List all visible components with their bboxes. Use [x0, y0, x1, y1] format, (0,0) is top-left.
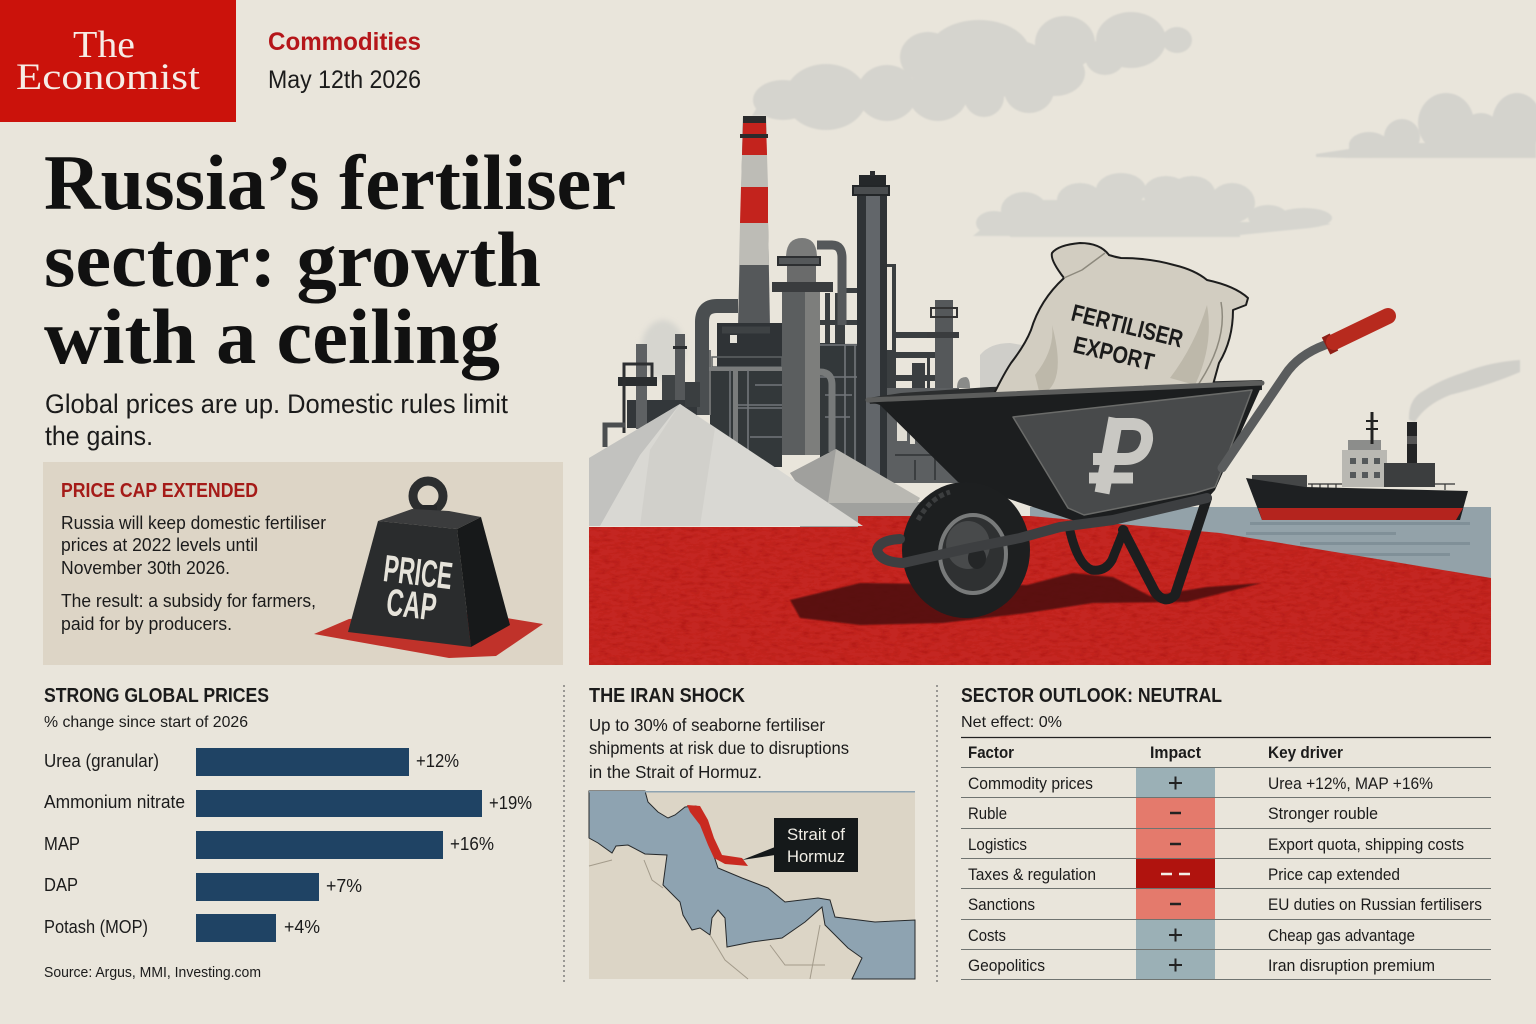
title: with a ceiling: [44, 293, 500, 380]
table header: Impact: [1150, 743, 1201, 762]
arm with red grip: [1222, 316, 1388, 468]
smoke cloud from chimney: [752, 12, 1192, 130]
panel: price cap extended: [43, 462, 563, 665]
tray: [868, 383, 1262, 527]
title: [44, 139, 626, 380]
bar: ammonium nitrate: [44, 790, 532, 817]
tall column: [853, 171, 889, 480]
row: ruble: [968, 804, 1378, 823]
row: costs: Costs: [968, 926, 1006, 945]
chart heading: STRONG GLOBAL PRICES: [44, 685, 269, 707]
row: taxes and regulation: Taxes & regulation: [968, 865, 1096, 884]
section and date: May 12th 2026: [268, 66, 421, 94]
masthead logo: The: [73, 24, 135, 66]
wheelbarrow: [868, 243, 1388, 618]
subtitle: the gains.: [45, 421, 153, 451]
fertiliser pile: [589, 404, 863, 526]
chimney: [738, 116, 770, 327]
ruble sign: [1089, 418, 1147, 493]
ground shadow: [790, 573, 1262, 625]
left towers: [605, 334, 700, 447]
outlook heading: SECTOR OUTLOOK: NEUTRAL: [961, 685, 1222, 707]
bar: DAP: [44, 873, 362, 901]
row: ruble: Stronger rouble: [1268, 804, 1378, 823]
row: ruble: Ruble: [968, 804, 1007, 823]
bar: ammonium nitrate: +19%: [489, 793, 532, 813]
callout: Strait of Hormuz: Hormuz: [787, 847, 845, 866]
back rim: [868, 380, 1262, 404]
price cap body text: November 30th 2026.: [61, 558, 230, 578]
process block: [703, 323, 857, 470]
bar: DAP: +7%: [326, 876, 362, 896]
bar: urea: [44, 748, 459, 776]
Iran heading: THE IRAN SHOCK: [589, 685, 745, 707]
ship smoke: [1409, 360, 1520, 422]
Iran body text: in the Strait of Hormuz.: [589, 762, 762, 782]
table header: Factor: [968, 743, 1014, 762]
row: logistics: [968, 835, 1464, 854]
cloud centre: [973, 173, 1332, 237]
outlook table: [961, 738, 1491, 980]
chart subheading: % change since start of 2026: [44, 714, 248, 731]
bar: urea: Urea (granular): [44, 751, 159, 771]
pipes: [702, 245, 842, 452]
price cap body text: The result: a subsidy for farmers,: [61, 591, 316, 611]
row: logistics: Logistics: [968, 835, 1027, 854]
bar: potash: Potash (MOP): [44, 917, 148, 937]
icon: price cap weight: [314, 481, 543, 658]
back frame: [820, 264, 937, 480]
masthead logo: [0, 0, 236, 122]
bar: potash: +4%: [284, 917, 320, 937]
cloud right: [1316, 93, 1536, 158]
row: commodity prices: Urea +12%, MAP +16%: [1268, 774, 1433, 793]
bar: urea: +12%: [416, 751, 459, 771]
Iran body text: [589, 715, 849, 782]
icon: price cap weight: CAP: [384, 582, 439, 629]
price cap body text: Russia will keep domestic fertiliser: [61, 513, 326, 533]
row: sanctions: Sanctions: [968, 895, 1035, 914]
map water: [589, 791, 915, 979]
row: costs: [968, 926, 1415, 945]
callout: Strait of Hormuz: Strait of: [787, 825, 845, 844]
row: geopolitics: [968, 956, 1435, 975]
frame tube: [877, 498, 1207, 563]
net effect: Net effect: 0%: [961, 714, 1062, 731]
row: geopolitics: Geopolitics: [968, 956, 1045, 975]
fertiliser bag: EXPORT: [1071, 332, 1157, 376]
right tower: [887, 300, 970, 483]
row: commodity prices: Commodity prices: [968, 774, 1093, 793]
chart: strong global prices: [44, 685, 532, 981]
panel: sector outlook: [961, 685, 1491, 980]
main column: [772, 238, 833, 455]
price cap heading: PRICE CAP EXTENDED: [61, 480, 258, 502]
subtitle: [45, 389, 508, 451]
fertiliser bag: [990, 243, 1248, 402]
bar: potash: [44, 914, 320, 942]
map: Strait of Hormuz: [589, 791, 915, 979]
bar: MAP: [44, 831, 494, 859]
price cap body text: prices at 2022 levels until: [61, 535, 258, 555]
row: geopolitics: Iran disruption premium: [1268, 956, 1435, 975]
table header: Key driver: [1268, 743, 1343, 762]
impact cells: [1136, 768, 1215, 979]
Iran body text: Up to 30% of seaborne fertiliser: [589, 715, 825, 735]
row: sanctions: [968, 895, 1482, 914]
refinery: [605, 116, 970, 483]
row: taxes and regulation: [968, 865, 1400, 884]
illustration: refinery, wheelbarrow and ship: [589, 12, 1536, 665]
Iran body text: shipments at risk due to disruptions: [589, 738, 849, 758]
highlighted shipping route: [687, 805, 748, 866]
title: sector: growth: [44, 216, 541, 303]
table header: [968, 743, 1343, 762]
section and date: [268, 28, 421, 94]
legs: [1070, 498, 1207, 599]
front rim: [868, 383, 1262, 400]
price cap body text: paid for by producers.: [61, 614, 232, 634]
callout: Strait of Hormuz: [742, 818, 858, 872]
subtitle: Global prices are up. Domestic rules limit: [45, 389, 508, 419]
ground: red fertiliser field: [589, 516, 1491, 665]
row: taxes and regulation: Price cap extended: [1268, 865, 1400, 884]
grey pad: [800, 502, 940, 528]
icon: price cap weight: PRICE: [381, 548, 455, 598]
bar: DAP: DAP: [44, 875, 78, 895]
source: Source: Argus, MMI, Investing.com: [44, 964, 261, 981]
title: Russia’s fertiliser: [44, 139, 626, 226]
section and date: Commodities: [268, 28, 421, 56]
row: commodity prices: [968, 774, 1433, 793]
bar: MAP: +16%: [450, 834, 494, 854]
wheel: [902, 482, 1030, 618]
water: [1030, 507, 1491, 592]
ship: [1246, 412, 1468, 520]
bar: MAP: MAP: [44, 834, 80, 854]
bar: ammonium nitrate: Ammonium nitrate: [44, 792, 185, 812]
row: costs: Cheap gas advantage: [1268, 926, 1415, 945]
second fertiliser pile: [790, 449, 920, 503]
masthead logo: Economist: [16, 57, 201, 98]
background haze behind refinery: [641, 320, 685, 380]
row: logistics: Export quota, shipping costs: [1268, 835, 1464, 854]
fertiliser bag: FERTILISER: [1069, 300, 1186, 353]
price cap body text: [61, 513, 326, 634]
row: sanctions: EU duties on Russian fertilisers: [1268, 895, 1482, 914]
panel: the Iran shock: [589, 685, 915, 979]
